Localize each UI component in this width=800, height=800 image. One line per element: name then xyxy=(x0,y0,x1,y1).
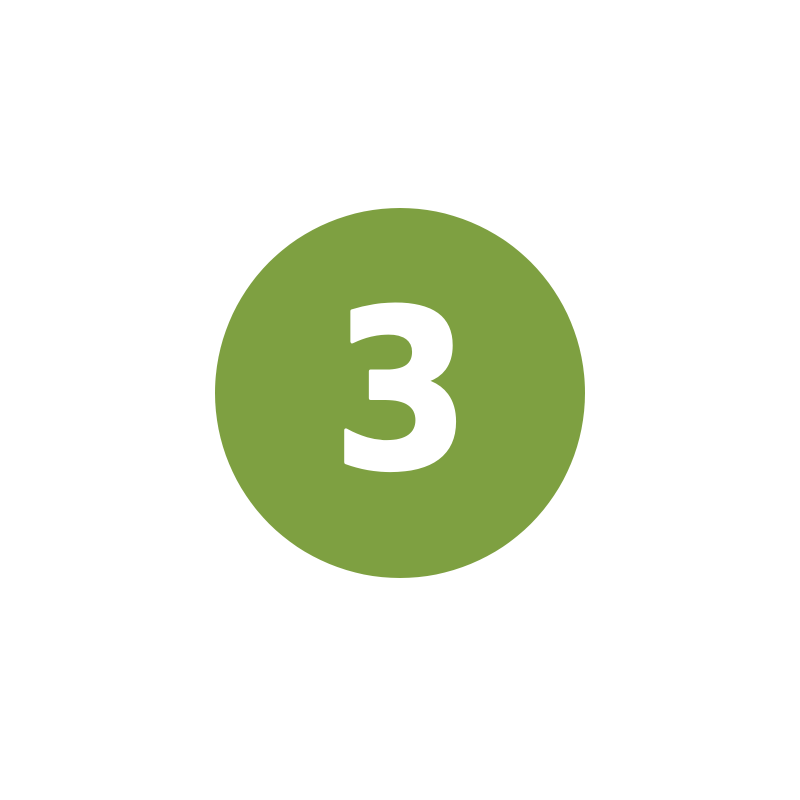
numbered badge: 3 xyxy=(215,208,585,578)
numbered badge: 3: 3 xyxy=(333,265,470,520)
